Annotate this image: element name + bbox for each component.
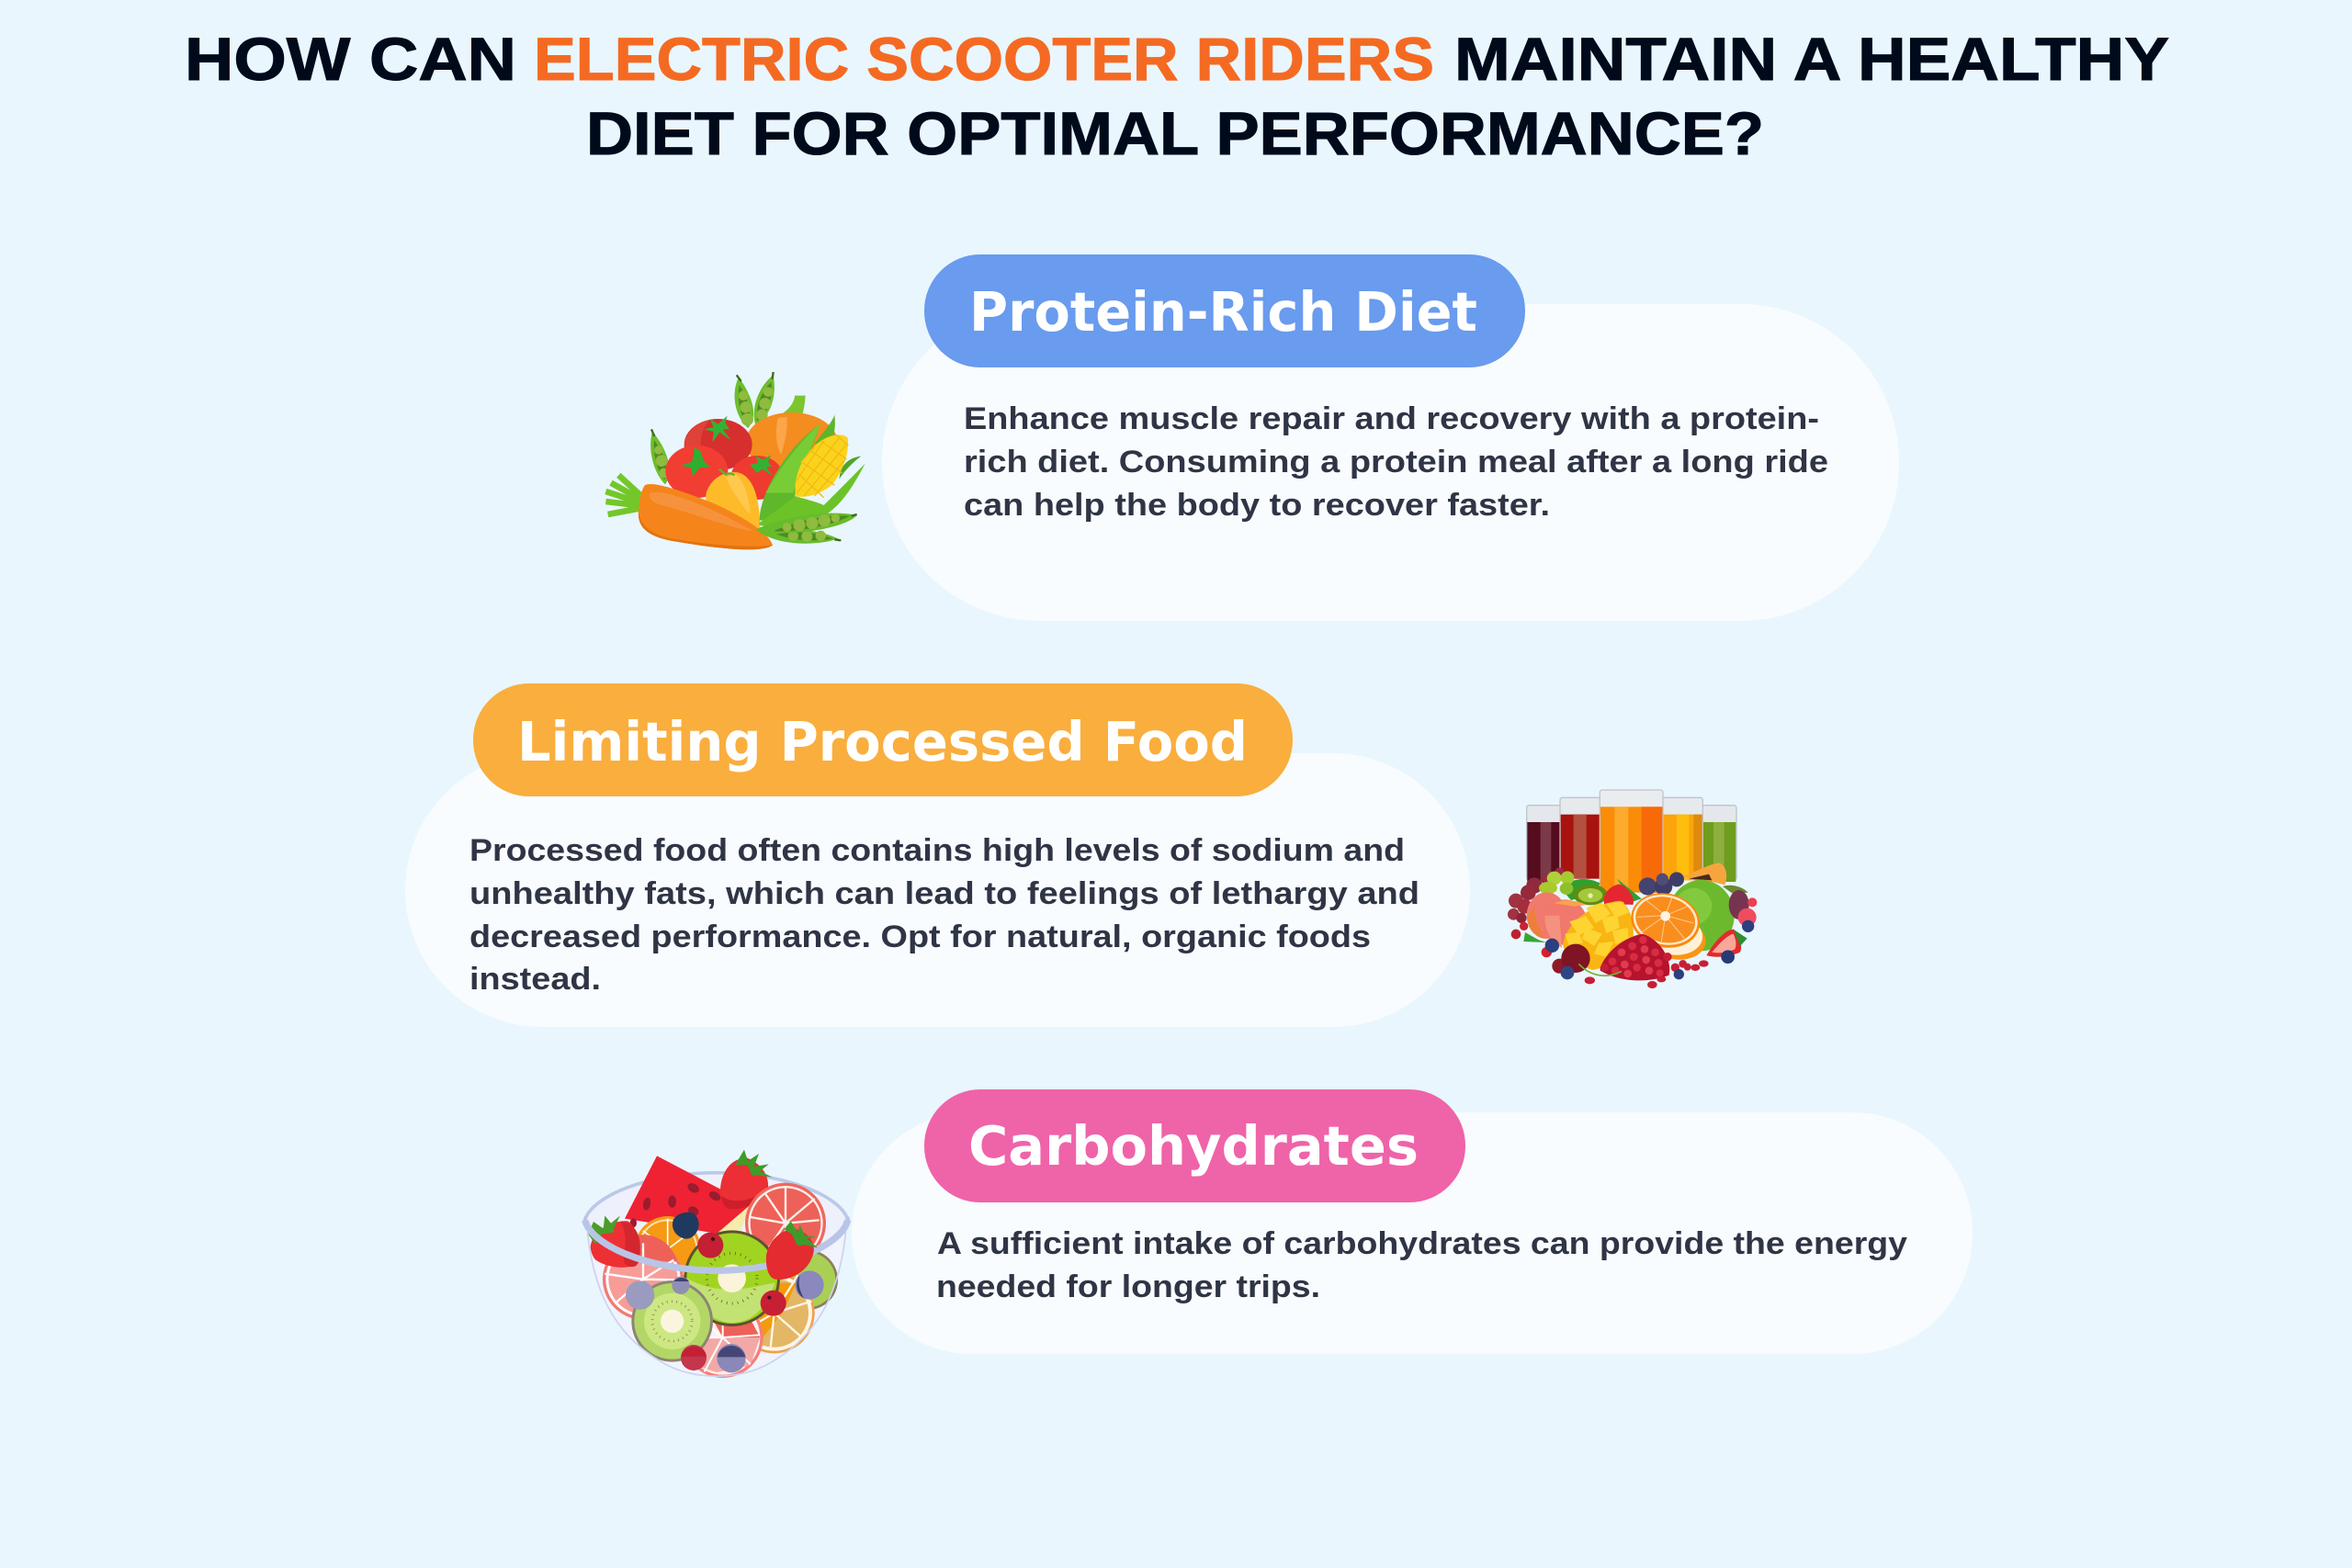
text block: protein description: rich diet. Consuming a protein meal after a long ride — [964, 445, 1828, 479]
text block: processed food description: decreased performance. Opt for natural, organic foods — [469, 919, 1371, 954]
text block: processed food description: Processed food often contains high levels of sodium and — [469, 833, 1405, 868]
text block: carbohydrates description: needed for longer trips. — [936, 1269, 1320, 1304]
icon: vegetables — [605, 372, 865, 549]
panel: carbohydrates — [852, 1089, 1973, 1354]
text block: processed food description — [469, 833, 1419, 997]
panel: limiting processed food — [405, 683, 1470, 1027]
title: DIET FOR OPTIMAL PERFORMANCE? — [586, 100, 1764, 167]
text block: carbohydrates description — [936, 1226, 1907, 1304]
text block: carbohydrates description: A sufficient intake of carbohydrates can provide the energy — [937, 1226, 1907, 1261]
title: ELECTRIC SCOOTER RIDERS — [534, 26, 1434, 93]
title — [185, 26, 2169, 167]
heading pill: limiting processed food — [473, 683, 1293, 796]
heading pill: limiting processed food: Limiting Processed Food — [517, 710, 1248, 773]
panel: protein-rich diet — [882, 254, 1899, 621]
heading pill: protein-rich diet: Protein-Rich Diet — [969, 280, 1477, 344]
text block: processed food description: unhealthy fats, which can lead to feelings of lethargy and — [469, 876, 1419, 911]
title: HOW CAN — [185, 26, 516, 93]
heading pill: carbohydrates — [924, 1089, 1465, 1202]
text block: protein description: can help the body to recover faster. — [964, 488, 1550, 523]
text block: processed food description: instead. — [469, 962, 601, 997]
text block: protein description: Enhance muscle repair and recovery with a protein- — [964, 401, 1819, 436]
heading pill: carbohydrates: Carbohydrates — [968, 1114, 1419, 1178]
text block: protein description — [964, 401, 1828, 523]
icon: fruit bowl — [583, 1150, 850, 1378]
icon: juice glasses and fruit — [1508, 790, 1757, 988]
title: MAINTAIN A HEALTHY — [1454, 26, 2169, 93]
heading pill: protein-rich diet — [924, 254, 1525, 367]
